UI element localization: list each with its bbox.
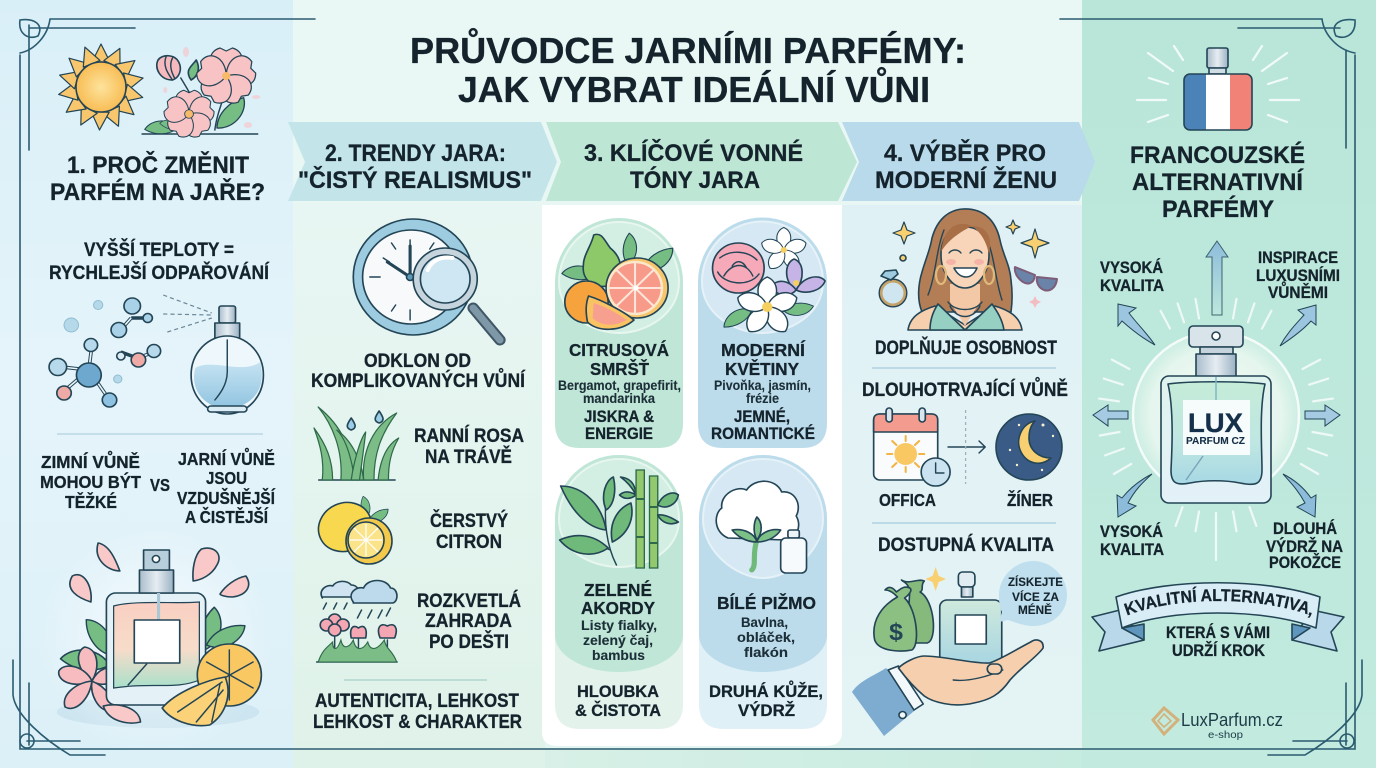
text: white musk: flakón [744, 645, 788, 660]
text: long lasting scent: DLOUHOTRVAJÍCÍ VŮNĚ [862, 378, 1068, 401]
banner arrow: key notes [546, 122, 857, 201]
icon: ring mirror [879, 255, 907, 307]
text: that keeps up with you [1166, 623, 1270, 660]
text: green accords: AKORDY [581, 598, 655, 618]
heading: french alternative perfumes [1130, 141, 1305, 223]
icon: tea leaves and bamboo [560, 470, 678, 568]
text: green accords: zelený čaj, [583, 633, 653, 648]
illustration: perfume with petals and citrus [36, 525, 274, 755]
icon: blooming garden after rain [316, 580, 398, 662]
logo: luxparfum.cz: LuxParfum.cz [1181, 710, 1283, 730]
panel: 1 why change perfume [0, 0, 293, 768]
arrows: benefits radiating from bottle [1093, 241, 1340, 517]
text: white musk: obláček, [737, 630, 795, 645]
comparison: winter vs spring scents [40, 447, 276, 527]
label: inspired by luxury scents [1256, 249, 1340, 302]
comparison: winter vs spring scents: JSOU [206, 468, 247, 488]
icon: cotton and small flask [716, 481, 807, 573]
text: higher temperatures [49, 239, 270, 284]
text: green accords: HLOUBKA [577, 683, 659, 701]
comparison: winter vs spring scents: A ČISTĚJŠÍ [185, 506, 269, 527]
ribbon: quality alternative [1091, 582, 1345, 652]
banner arrow: modern woman: MODERNÍ ŽENU [875, 166, 1057, 194]
panel: 3 key notes [542, 122, 857, 746]
text: authenticity summary: LEHKOST & CHARAKTER [313, 712, 522, 733]
title: JAK VYBRAT IDEÁLNÍ VŮNI [458, 65, 930, 110]
icon: money bags: $ [889, 619, 903, 646]
comparison: winter vs spring scents: JARNÍ VŮNĚ [178, 447, 275, 469]
title: PRŮVODCE JARNÍMI PARFÉMY: [410, 26, 966, 71]
bottom strip background [545, 748, 1082, 768]
label text on bottle: LUX [1188, 408, 1243, 438]
text: departure from complicated scents: KOMPLIKOVANÝCH VŮNÍ [311, 369, 526, 392]
labels: office and dinner: OFFICA [879, 490, 936, 510]
icon: french flag bottle [1137, 46, 1299, 130]
heading: section 1 [50, 151, 265, 206]
icon: sparkles [893, 220, 1049, 308]
text: citrus burst: JISKRA & [584, 408, 654, 426]
panel: 4 choice for modern woman [842, 122, 1095, 746]
text: citrus burst: mandarinka [583, 391, 655, 406]
labels: office and dinner [879, 489, 1053, 510]
icon: citrus fruits [561, 233, 678, 329]
banner arrow: trends: "ČISTÝ REALISMUS" [298, 166, 532, 194]
heading: french alternative perfumes: ALTERNATIVNÍ [1132, 168, 1304, 196]
text: fresh lemon: CITRON [436, 532, 502, 553]
panel: french alternative perfumes [1082, 0, 1376, 768]
comparison: winter vs spring scents: MOHOU BÝT [40, 471, 141, 492]
ribbon: quality alternative: KVALITNÍ ALTERNATIVA, [1124, 586, 1312, 618]
panel: 2 trends [288, 122, 557, 768]
label: long lasting on skin [1266, 519, 1343, 572]
icon: lemon [310, 494, 392, 564]
heading: french alternative perfumes: PARFÉMY [1162, 195, 1274, 223]
label: long lasting on skin: DLOUHÁ [1273, 519, 1337, 538]
glow and rays behind bottle [1099, 299, 1333, 560]
icon: spring flowers [142, 47, 260, 141]
text: complements personality: DOPLŇUJE OSOBNOST [875, 337, 1057, 359]
label: high quality top [1100, 258, 1164, 295]
text: blooming garden after rain: ZAHRADA [425, 611, 512, 632]
card: white musk [699, 455, 827, 729]
text: blooming garden after rain: PO DEŠTI [429, 631, 509, 653]
text: white musk: DRUHÁ KŮŽE, [709, 681, 823, 701]
banner arrow: modern woman [842, 122, 1095, 201]
text: that keeps up with you: KTERÁ S VÁMI [1166, 623, 1270, 642]
text: fresh lemon [430, 510, 508, 553]
text: modern florals: KVĚTINY [725, 358, 799, 379]
text: citrus burst: Bergamot, grapefirit, [558, 378, 681, 393]
logo: luxparfum.cz: e-shop [1208, 730, 1243, 741]
icon: sunglasses [1015, 267, 1057, 291]
text: green accords: bambus [592, 648, 645, 663]
banner arrow: key notes: TÓNY JARA [630, 166, 760, 194]
label text on bottle: PARFUM CZ [1186, 435, 1246, 447]
label: high quality bottom: KVALITA [1100, 541, 1164, 559]
icon: clock with magnifier [353, 219, 500, 340]
text: authenticity summary [313, 691, 522, 733]
callout: get more for less: VÍCE ZA [1012, 589, 1059, 604]
comparison: winter vs spring scents: VS [150, 475, 170, 495]
text: citrus burst [558, 339, 681, 443]
text: citrus burst: ENERGIE [585, 425, 653, 443]
text: higher temperatures: RYCHLEJŠÍ ODPAŘOVÁNÍ [49, 262, 270, 284]
icon: calendar with sun [874, 408, 950, 486]
text: modern florals [711, 339, 815, 443]
divider [872, 522, 1056, 524]
text: white musk: BÍLÉ PIŽMO [717, 592, 816, 613]
text: white musk: Bavlna, [741, 615, 788, 630]
icon: molecules [49, 298, 161, 407]
icon: sun [57, 44, 145, 130]
labels: office and dinner: ŽÍNER [1007, 489, 1053, 510]
illustration: hand holding bottle [852, 572, 1043, 736]
text: that keeps up with you: UDRŽÍ KROK [1172, 641, 1265, 660]
text: modern florals: frézie [746, 391, 779, 406]
icon: round spray bottle [163, 295, 263, 414]
text: green accords: & ČISTOTA [575, 701, 661, 720]
text: green accords [575, 579, 661, 720]
divider [344, 679, 487, 681]
label: high quality bottom: VYSOKÁ [1100, 522, 1163, 541]
heading: french alternative perfumes: FRANCOUZSKÉ [1130, 141, 1305, 169]
text: authenticity summary: AUTENTICITA, LEHKOST [315, 691, 519, 712]
callout: get more for less [999, 561, 1067, 626]
text: modern florals: Pivoňka, jasmín, [714, 378, 811, 393]
text: blooming garden after rain: ROZKVETLÁ [417, 590, 521, 612]
text: fresh lemon: ČERSTVÝ [430, 510, 508, 532]
heading: section 1: PARFÉM NA JAŘE? [50, 178, 265, 206]
text: morning dew [414, 425, 524, 468]
text: white musk [709, 592, 823, 720]
card: citrus [555, 218, 683, 448]
text: departure from complicated scents [311, 351, 526, 392]
text: modern florals: MODERNÍ [721, 339, 806, 360]
divider [872, 367, 1056, 369]
text: white musk: VÝDRŽ [738, 701, 795, 720]
label: inspired by luxury scents: INSPIRACE [1258, 249, 1338, 267]
text: affordable quality: DOSTUPNÁ KVALITA [878, 534, 1054, 556]
text: citrus burst: SMRŠŤ [590, 358, 649, 379]
icon: money bags [874, 567, 946, 651]
logo: luxparfum.cz [1153, 708, 1283, 741]
text: green accords: ZELENÉ [584, 579, 652, 600]
heading: section 1: 1. PROČ ZMĚNIT [67, 151, 249, 179]
label: high quality top: KVALITA [1100, 277, 1164, 295]
callout: get more for less: ZÍSKEJTE [1008, 574, 1063, 589]
icon: flower bouquet [713, 228, 825, 337]
banner arrow: trends: 2. TRENDY JARA: [325, 140, 506, 167]
label text on bottle [1186, 408, 1246, 447]
card: green accords [555, 455, 683, 729]
card: modern florals [698, 218, 827, 448]
title [410, 26, 966, 110]
text: higher temperatures: VYŠŠÍ TEPLOTY = [84, 239, 234, 261]
text: morning dew: RANNÍ ROSA [414, 425, 524, 447]
callout: get more for less: MÉNĚ [1018, 602, 1052, 617]
icon: moon night [996, 414, 1062, 480]
arrow: day to evening [948, 410, 985, 484]
illustration: smiling woman [908, 209, 1022, 330]
text: modern florals: ROMANTICKÉ [711, 424, 815, 443]
label: long lasting on skin: VÝDRŽ NA [1266, 537, 1343, 556]
banner arrow: key notes: 3. KLÍČOVÉ VONNÉ [584, 139, 803, 167]
text: morning dew: NA TRÁVĚ [425, 446, 512, 468]
comparison: winter vs spring scents: VZDUŠNĚJŠÍ [177, 487, 276, 508]
banner arrow: trends [288, 122, 557, 201]
icon: grass with dew [314, 407, 399, 480]
banner arrow: modern woman: 4. VÝBĚR PRO [884, 139, 1046, 167]
text: modern florals: JEMNÉ, [734, 407, 790, 426]
comparison: winter vs spring scents: ZIMNÍ VŮNĚ [41, 450, 140, 472]
label: high quality bottom [1100, 522, 1164, 559]
comparison: winter vs spring scents: TĚŽKÉ [65, 491, 117, 512]
label: high quality top: VYSOKÁ [1100, 258, 1163, 277]
text: departure from complicated scents: ODKLON OD [364, 351, 471, 372]
text: citrus burst: CITRUSOVÁ [569, 339, 669, 360]
label: inspired by luxury scents: VŮNĚMI [1268, 282, 1328, 302]
label: long lasting on skin: POKOŽCE [1269, 553, 1341, 572]
label: inspired by luxury scents: LUXUSNÍMI [1256, 266, 1340, 285]
text: blooming garden after rain [417, 590, 521, 653]
divider [57, 433, 263, 435]
illustration: lux parfum bottle [1161, 326, 1271, 503]
text: green accords: Listy fialky, [581, 618, 657, 633]
